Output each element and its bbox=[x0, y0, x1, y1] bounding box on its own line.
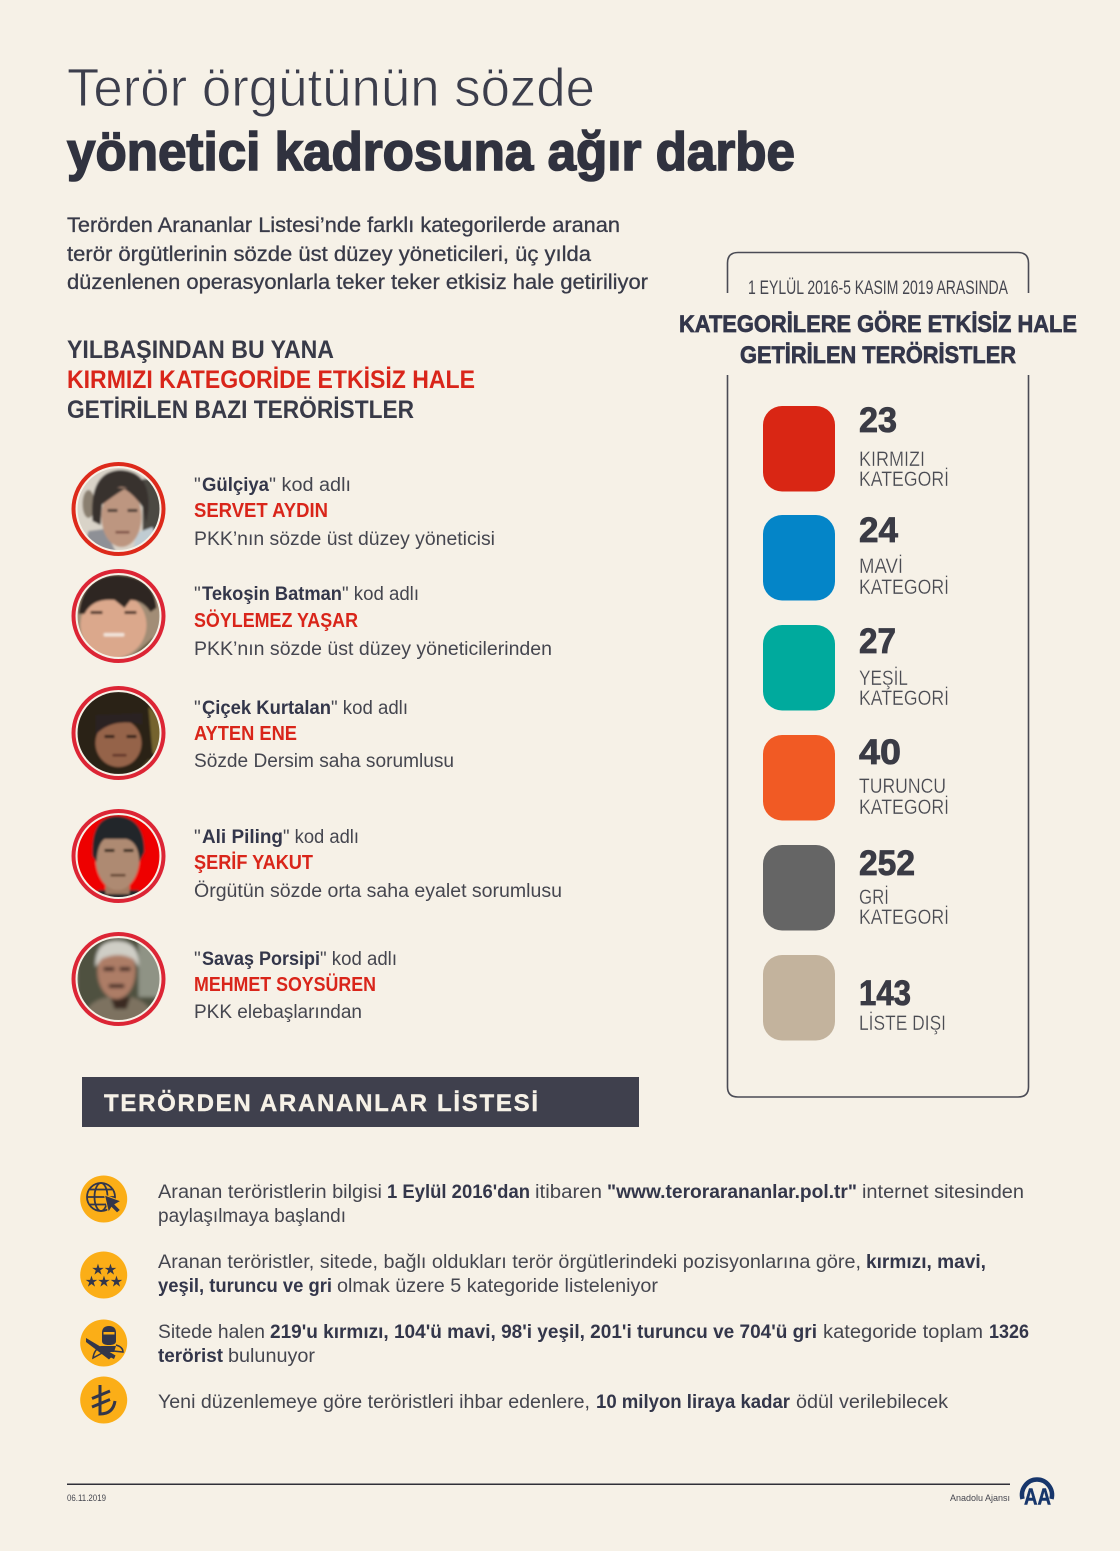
info text: 1 Eylül 2016'dan bbox=[387, 1182, 530, 1203]
info text: Aranan teröristler, sitede, bağlı oldukları terör örgütlerindeki pozisyonlarına göre, bbox=[158, 1252, 861, 1273]
category: grey: 252 bbox=[859, 844, 915, 883]
info text: olmak üzere 5 kategoride listeleniyor bbox=[337, 1276, 659, 1297]
person: Söylemez Yaşar: " kod adlı bbox=[342, 584, 419, 605]
info row: website bbox=[80, 1176, 1024, 1227]
info text: 10 milyon liraya kadar bbox=[596, 1392, 791, 1413]
person: Ayten Ene: AYTEN ENE bbox=[194, 723, 297, 745]
panel heading bbox=[679, 311, 1077, 369]
icon: stars bbox=[80, 1252, 127, 1298]
source: Anadolu Ajansı bbox=[950, 1493, 1010, 1504]
category: grey bbox=[763, 844, 949, 930]
icon: masked gunman bbox=[80, 1320, 127, 1366]
category: red: KIRMIZI bbox=[859, 448, 925, 471]
person: Servet Aydın bbox=[74, 464, 495, 554]
portrait bbox=[74, 571, 164, 661]
info text: Yeni düzenlemeye göre teröristleri ihbar edenlere, bbox=[158, 1392, 590, 1413]
person: Şerif Yakut: " kod adlı bbox=[283, 827, 359, 848]
info text bbox=[158, 1182, 1024, 1227]
intro text block bbox=[67, 214, 648, 294]
person: Mehmet Soysüren: MEHMET SOYSÜREN bbox=[194, 973, 376, 996]
category: grey: GRİ bbox=[859, 886, 889, 909]
category: red bbox=[763, 401, 949, 492]
person: Servet Aydın: " kod adlı bbox=[269, 475, 351, 496]
category: green: YEŞİL bbox=[859, 667, 908, 690]
category: red: 23 bbox=[859, 401, 897, 440]
panel: categories bbox=[679, 252, 1077, 1097]
category: orange: TURUNCU bbox=[859, 775, 946, 798]
intro text block: Terörden Arananlar Listesi’nde farklı kategorilerde aranan bbox=[67, 214, 620, 237]
person: Ayten Ene: " kod adlı bbox=[331, 698, 408, 719]
person: Ayten Ene: Çiçek Kurtalan bbox=[202, 698, 331, 719]
info text: 1326 bbox=[989, 1322, 1029, 1343]
info text: yeşil, turuncu ve gri bbox=[158, 1276, 332, 1297]
info text: internet sitesinden bbox=[862, 1182, 1024, 1203]
info text: ödül verilebilecek bbox=[796, 1392, 949, 1413]
category: blue: KATEGORİ bbox=[859, 576, 949, 599]
person: Servet Aydın: Gülçiya bbox=[202, 475, 269, 496]
icon: stars: ★ bbox=[110, 1272, 123, 1290]
category: blue: 24 bbox=[859, 511, 899, 550]
section heading: red category: GETİRİLEN BAZI TERÖRİSTLER bbox=[67, 395, 414, 424]
person: Ayten Ene bbox=[74, 688, 454, 778]
person: Ayten Ene: " bbox=[194, 698, 201, 719]
icon: stars: ★ bbox=[97, 1272, 111, 1290]
info text bbox=[158, 1392, 949, 1413]
info text bbox=[158, 1322, 1029, 1367]
info text: 219'u kırmızı, 104'ü mavi, 98'i yeşil, 201'i turuncu ve 704'ü gri bbox=[270, 1322, 817, 1343]
category: orange: KATEGORİ bbox=[859, 796, 949, 819]
person: Söylemez Yaşar: Tekoşin Batman bbox=[202, 584, 342, 605]
person: Mehmet Soysüren bbox=[74, 934, 397, 1024]
person: Şerif Yakut: " bbox=[194, 827, 201, 848]
person: Şerif Yakut: ŞERİF YAKUT bbox=[194, 851, 313, 874]
category: grey: KATEGORİ bbox=[859, 906, 949, 929]
info text: paylaşılmaya başlandı bbox=[158, 1206, 346, 1227]
section heading: red category: KIRMIZI KATEGORİDE ETKİSİZ HALE bbox=[67, 366, 475, 394]
info row: reward bbox=[80, 1376, 949, 1424]
category: off-list: LİSTE DIŞI bbox=[859, 1012, 946, 1035]
category: blue: MAVİ bbox=[859, 555, 903, 578]
wanted list banner bbox=[82, 1077, 639, 1127]
panel heading: KATEGORİLERE GÖRE ETKİSİZ HALE bbox=[679, 311, 1077, 338]
footer bbox=[67, 1480, 1052, 1510]
person: Servet Aydın: SERVET AYDIN bbox=[194, 500, 328, 522]
category: off-list: 143 bbox=[859, 974, 911, 1013]
icon: stars: ★ bbox=[85, 1272, 98, 1290]
info text: Aranan teröristlerin bilgisi bbox=[158, 1182, 382, 1203]
person: Söylemez Yaşar bbox=[74, 571, 552, 661]
wanted list banner: TERÖRDEN ARANANLAR LİSTESİ bbox=[104, 1090, 538, 1117]
icon: stars: ★ bbox=[104, 1260, 117, 1278]
person: Söylemez Yaşar: SÖYLEMEZ YAŞAR bbox=[194, 609, 358, 632]
portrait bbox=[74, 464, 164, 554]
info text: terörist bbox=[158, 1346, 224, 1367]
person: Mehmet Soysüren: PKK elebaşlarından bbox=[194, 1002, 362, 1023]
category: green: 27 bbox=[859, 622, 896, 661]
panel frame bbox=[728, 252, 1028, 1097]
person: Servet Aydın: PKK’nın sözde üst düzey yöneticisi bbox=[194, 529, 495, 550]
person: Şerif Yakut bbox=[74, 811, 562, 902]
icon: stars: ★ bbox=[91, 1260, 105, 1278]
info row: counts bbox=[80, 1320, 1029, 1367]
person: Söylemez Yaşar: PKK’nın sözde üst düzey yöneticilerinden bbox=[194, 639, 552, 660]
person: Söylemez Yaşar: " bbox=[194, 584, 201, 605]
portrait bbox=[74, 934, 164, 1024]
portrait bbox=[74, 688, 164, 778]
section heading: red category bbox=[67, 336, 475, 424]
info row: categories bbox=[80, 1252, 986, 1298]
title bbox=[67, 58, 795, 182]
title: Terör örgütünün sözde bbox=[67, 58, 595, 118]
date: 06.11.2019 bbox=[67, 1493, 106, 1503]
intro text block: terör örgütlerinin sözde üst düzey yöneticileri, üç yılda bbox=[67, 243, 591, 266]
category: orange: 40 bbox=[859, 733, 901, 772]
info text: "www.terorarananlar.pol.tr" bbox=[607, 1182, 857, 1203]
category: orange bbox=[763, 733, 949, 820]
person: Servet Aydın: " bbox=[194, 475, 201, 496]
category: green bbox=[763, 622, 949, 710]
info text bbox=[158, 1252, 986, 1297]
person: Ayten Ene: Sözde Dersim saha sorumlusu bbox=[194, 751, 454, 772]
panel date: 1 EYLÜL 2016-5 KASIM 2019 ARASINDA bbox=[748, 278, 1008, 299]
person: Şerif Yakut: Ali Piling bbox=[202, 827, 283, 848]
icon: globe and cursor bbox=[80, 1176, 127, 1222]
info text: itibaren bbox=[535, 1182, 602, 1203]
category: green: KATEGORİ bbox=[859, 687, 949, 710]
category: off-list bbox=[763, 955, 946, 1040]
info text: kategoride toplam bbox=[823, 1322, 983, 1343]
panel heading: GETİRİLEN TERÖRİSTLER bbox=[740, 342, 1016, 369]
logo: Anadolu Agency: AA bbox=[1024, 1484, 1051, 1510]
person: Mehmet Soysüren: " kod adlı bbox=[320, 949, 397, 970]
person: Mehmet Soysüren: Savaş Porsipi bbox=[202, 949, 320, 970]
intro text block: düzenlenen operasyonlarla teker teker etkisiz hale getiriliyor bbox=[67, 271, 648, 294]
info text: bulunuyor bbox=[228, 1346, 316, 1367]
category: blue bbox=[763, 511, 949, 600]
icon: lira bbox=[80, 1376, 127, 1424]
category: red: KATEGORİ bbox=[859, 468, 949, 491]
person: Mehmet Soysüren: " bbox=[194, 949, 201, 970]
portrait bbox=[74, 811, 164, 901]
title: yönetici kadrosuna ağır darbe bbox=[67, 122, 795, 182]
info text: kırmızı, mavi, bbox=[866, 1252, 986, 1273]
section heading: red category: YILBAŞINDAN BU YANA bbox=[67, 336, 334, 364]
person: Şerif Yakut: Örgütün sözde orta saha eyalet sorumlusu bbox=[194, 881, 562, 902]
info text: Sitede halen bbox=[158, 1322, 265, 1343]
